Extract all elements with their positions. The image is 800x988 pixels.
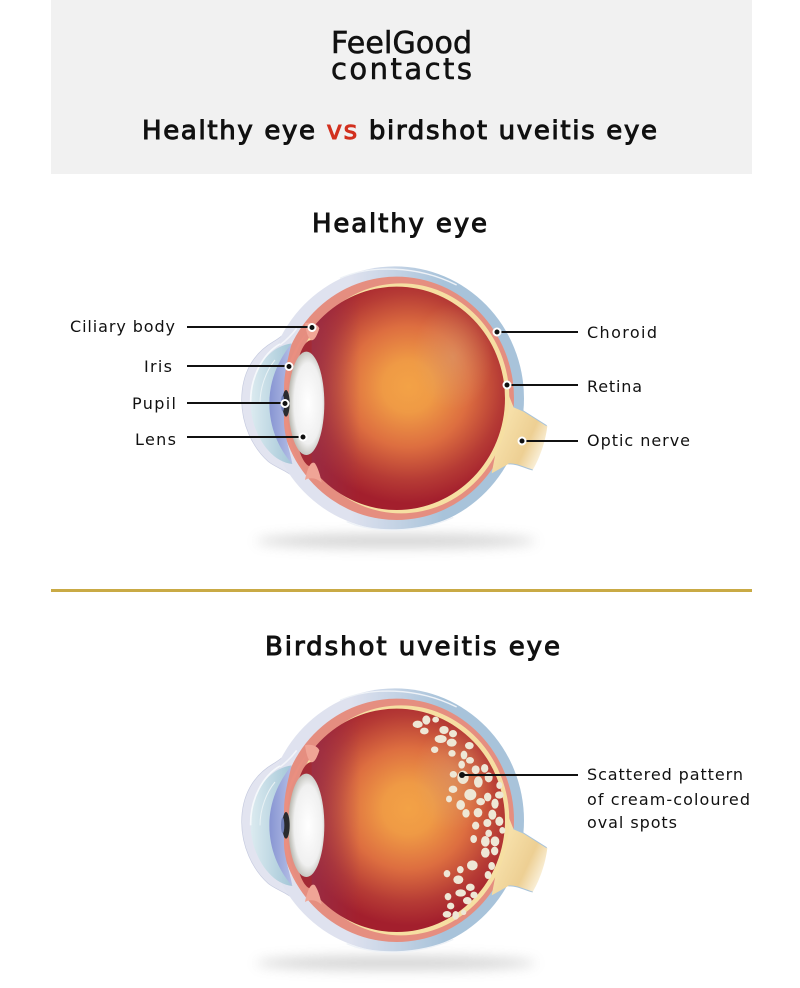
label: iris xyxy=(144,357,292,376)
callout: scattered pattern xyxy=(459,765,750,832)
label: choroid: Choroid xyxy=(587,323,657,342)
diagram: birdshot uveitis eye xyxy=(242,688,547,952)
heading: healthy eye: Healthy eye xyxy=(312,209,487,239)
main title: Healthy eye vs birdshot uveitis eye xyxy=(142,116,657,146)
label: optic nerve: Optic nerve xyxy=(587,431,690,450)
logo: FeelGood contacts xyxy=(331,26,472,86)
callout: scattered pattern: oval spots xyxy=(587,813,677,832)
label: lens xyxy=(135,430,306,449)
label: retina xyxy=(504,377,642,396)
label: iris: Iris xyxy=(144,357,172,376)
label: lens: Lens xyxy=(135,430,176,449)
shadow: healthy eye xyxy=(256,534,536,548)
labels: healthy eye xyxy=(70,317,690,450)
callout: scattered pattern: Scattered pattern xyxy=(587,765,743,784)
heading: birdshot uveitis eye: Birdshot uveitis eye xyxy=(265,632,560,662)
label: ciliary body: Ciliary body xyxy=(70,317,175,336)
label: ciliary body xyxy=(70,317,316,336)
label: pupil xyxy=(132,394,288,413)
label: choroid xyxy=(494,323,657,342)
label: pupil: Pupil xyxy=(132,394,176,413)
label: retina: Retina xyxy=(587,377,642,396)
logo: FeelGood contacts: FeelGood xyxy=(331,26,472,61)
label: optic nerve xyxy=(518,431,690,450)
shadow: birdshot eye xyxy=(256,956,536,970)
callout: scattered pattern: of cream-coloured xyxy=(587,790,750,809)
header band xyxy=(51,0,752,174)
gold divider xyxy=(51,589,752,592)
logo: FeelGood contacts: contacts xyxy=(331,52,472,86)
diagram: healthy eye xyxy=(242,266,547,530)
cream-coloured oval spots xyxy=(413,715,505,920)
